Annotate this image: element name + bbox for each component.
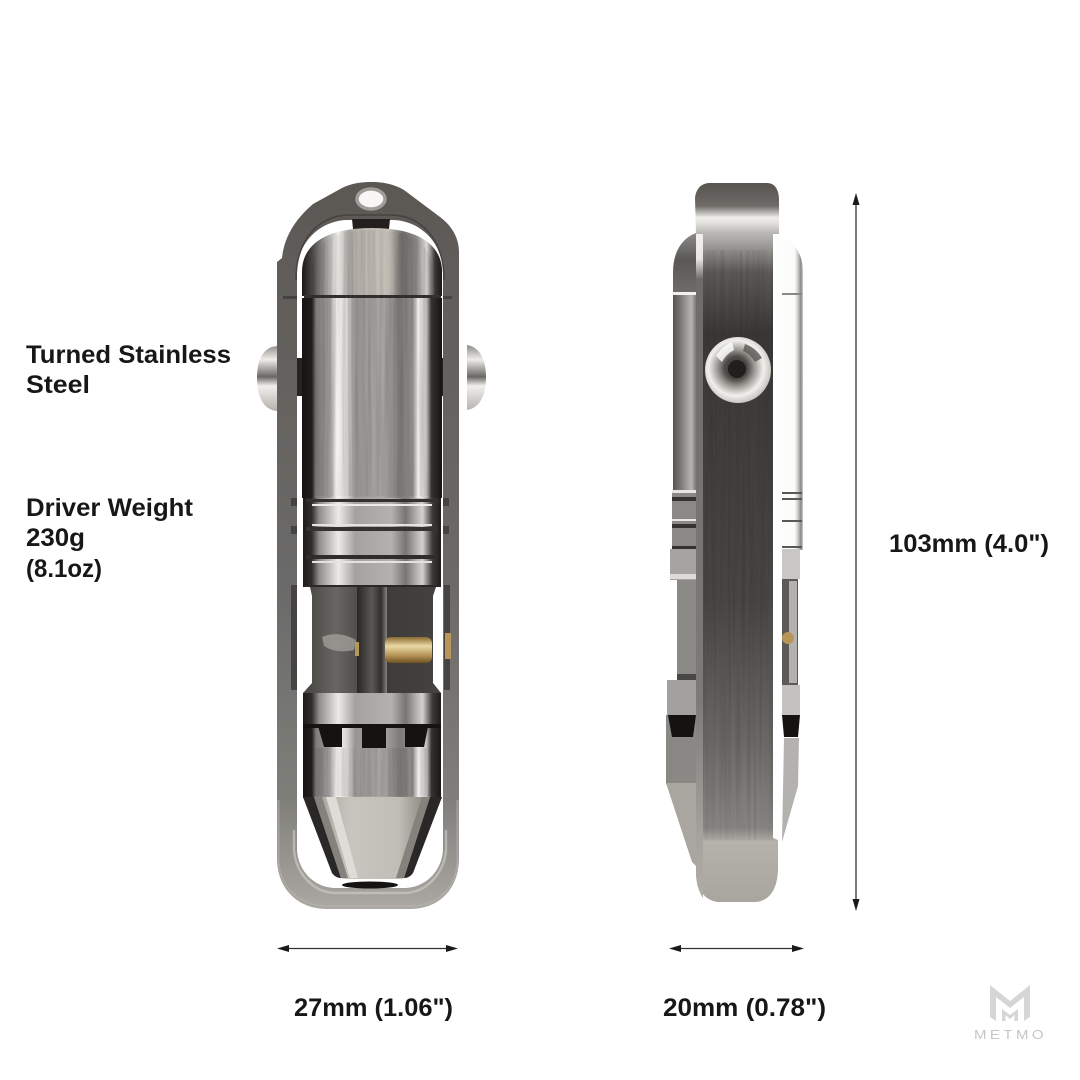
hanging eyelet <box>357 189 385 209</box>
central rod <box>357 587 387 694</box>
brass pin <box>385 637 432 663</box>
label: material <box>26 341 231 399</box>
slot with brass pin <box>782 579 798 685</box>
dimension: side width: 20mm (0.78") <box>663 994 826 1022</box>
side bolt <box>705 337 771 403</box>
left capsule side <box>666 233 696 866</box>
outer frame <box>277 182 459 909</box>
top gap stop <box>352 219 390 229</box>
right capsule side <box>773 232 803 842</box>
dimension: height: 103mm (4.0") <box>889 530 1049 558</box>
arrow: side width <box>669 945 804 952</box>
label: material: Turned Stainless <box>26 341 231 369</box>
top tab <box>695 183 779 234</box>
brushed texture on capsule <box>316 230 432 796</box>
side view of driver tool <box>666 183 803 902</box>
frame dark strips <box>291 585 450 690</box>
label: driver weight <box>26 494 194 583</box>
label: material: Steel <box>26 371 90 399</box>
arrow: front width <box>277 945 458 952</box>
front view of driver tool <box>257 182 486 909</box>
grooved rings <box>303 498 441 587</box>
frame rim strokes <box>278 800 458 906</box>
plate left bevel <box>696 232 703 898</box>
mechanism housing <box>303 587 441 693</box>
frame brass tip <box>445 633 451 659</box>
main plate <box>696 232 778 902</box>
side knob left <box>257 346 277 411</box>
arrow: height <box>852 193 860 911</box>
label: driver weight: 230g <box>26 524 85 552</box>
label: driver weight: Driver Weight <box>26 494 194 522</box>
scuff highlights on housing <box>322 634 356 651</box>
screw bits behind capsule <box>297 358 443 396</box>
side knob right <box>467 345 486 410</box>
logo: METMO: METMO <box>974 1027 1047 1042</box>
lower barrel <box>303 725 441 798</box>
nose opening <box>342 882 398 888</box>
capsule dome <box>302 228 442 296</box>
label: driver weight: (8.1oz) <box>26 555 102 583</box>
collar <box>303 693 441 725</box>
plate brushed texture <box>703 250 773 840</box>
seam <box>304 295 441 298</box>
logo: METMO <box>974 985 1047 1042</box>
capsule body <box>302 298 442 498</box>
frame side joint marks <box>283 296 452 534</box>
castellated teeth <box>303 724 441 748</box>
cone nose <box>303 797 442 879</box>
dimension: front width: 27mm (1.06") <box>294 994 453 1022</box>
